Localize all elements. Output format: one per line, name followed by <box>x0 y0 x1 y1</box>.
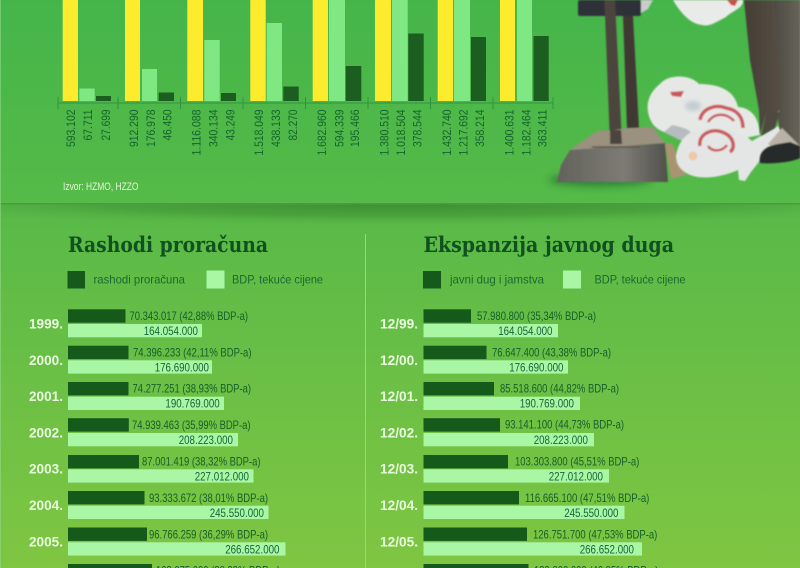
row 2001 <box>29 382 251 410</box>
row 12/99: 12/99. <box>380 316 418 332</box>
bar group 8: 1.400.631 <box>502 109 516 156</box>
row 2005: 2005. <box>29 533 63 549</box>
panel: public debt expansion <box>380 232 686 568</box>
row 12/05: 266.652.000 <box>580 542 634 556</box>
row 1999: 1999. <box>29 316 63 332</box>
row 2001: 74.277.251 (38,93% BDP-a) <box>132 382 251 396</box>
row 12/03: 227.012.000 <box>549 470 603 484</box>
bar group 6: 378.544 <box>410 109 424 147</box>
row 2000 <box>29 345 252 374</box>
bar group 7: 358.214 <box>473 109 487 147</box>
row 12/02: 208.223.000 <box>534 433 588 447</box>
row 2006 <box>68 564 280 568</box>
bar group 5: 594.339 <box>332 109 346 147</box>
legend <box>68 270 323 288</box>
row 12/02: 12/02. <box>380 424 418 440</box>
section shadow band <box>0 203 800 227</box>
legs and shoe <box>744 0 800 163</box>
row 12/04 <box>380 491 649 520</box>
bar group 2 <box>125 0 174 147</box>
bar group 5 <box>313 0 362 156</box>
row 12/00 <box>380 345 611 374</box>
row 12/01 <box>380 382 619 410</box>
row 2003: 227.012.000 <box>195 470 249 484</box>
row 12/99: 57.980.800 (35,34% BDP-a) <box>477 309 596 323</box>
row 2002: 208.223.000 <box>179 433 233 447</box>
bar group 6: 1.380.510 <box>378 109 392 156</box>
row 12/02: 93.141.100 (44,73% BDP-a) <box>505 418 624 432</box>
legend: BDP, tekuće cijene <box>594 272 686 286</box>
lower panel background <box>0 203 800 568</box>
row 12/03: 103.303.800 (45,51% BDP-a) <box>515 454 639 468</box>
bar group 6: 1.018.504 <box>394 109 408 156</box>
top panel background <box>0 0 800 203</box>
bar group 3 <box>187 0 238 156</box>
row 2002: 74.939.463 (35,99% BDP-a) <box>132 418 250 432</box>
row 2004 <box>29 491 268 520</box>
row 12/05 <box>380 528 657 556</box>
heading: Rashodi proračuna: Rashodi proračuna <box>68 232 268 257</box>
row 12/04: 12/04. <box>380 497 418 513</box>
bar group 5: 195.466 <box>348 109 362 147</box>
bag pile <box>648 76 782 181</box>
chart axis <box>58 97 553 109</box>
bar group 7: 1.217.692 <box>456 109 470 156</box>
bar group 2: 176.978 <box>144 109 158 147</box>
row 2005: 266.652.000 <box>225 542 280 556</box>
bar group 2: 46.450 <box>160 109 174 140</box>
row 2002 <box>29 418 250 447</box>
row 2001: 2001. <box>29 388 63 404</box>
row 12/02 <box>380 418 624 447</box>
bar group 1: 27.699 <box>99 109 113 140</box>
row 12/00: 76.647.400 (43,38% BDP-a) <box>492 345 611 359</box>
row 2004: 2004. <box>29 497 63 513</box>
bar group 4: 82.270 <box>286 109 300 140</box>
row 2003: 87.001.419 (38,32% BDP-a) <box>142 454 260 468</box>
row 2000: 176.690.000 <box>155 360 209 374</box>
row 12/00: 176.690.000 <box>509 360 564 374</box>
illustration: concrete post base, plastic bags and legs <box>548 0 800 186</box>
row 2005: 96.766.259 (36,29% BDP-a) <box>149 528 268 542</box>
bar group 8: 1.182.464 <box>520 109 534 156</box>
row 12/05: 126.751.700 (47,53% BDP-a) <box>533 528 657 542</box>
row 2003: 2003. <box>29 460 63 476</box>
bar group 1 <box>63 0 113 147</box>
row 2000: 2000. <box>29 352 63 368</box>
bar group 1: 593.102 <box>64 109 78 147</box>
ground shadow <box>548 174 652 186</box>
row 2004: 93.333.672 (38,01% BDP-a) <box>149 491 268 505</box>
row 12/03 <box>380 454 639 484</box>
bar group 6 <box>375 0 424 156</box>
row 12/03: 12/03. <box>380 460 418 476</box>
bar group 7: 1.432.740 <box>440 109 454 156</box>
sign post <box>578 0 653 144</box>
row 12/99 <box>380 309 596 338</box>
row 12/04: 245.550.000 <box>564 506 619 520</box>
bar group 4 <box>250 0 300 156</box>
bar group 3: 340.134 <box>206 109 220 147</box>
row 2002: 2002. <box>29 424 63 440</box>
row 12/01: 190.769.000 <box>520 396 574 410</box>
row 1999: 70.343.017 (42,88% BDP-a) <box>130 309 248 323</box>
divider between columns <box>364 234 366 568</box>
bar group 4: 1.518.049 <box>252 109 266 156</box>
row 12/01: 85.518.600 (44,82% BDP-a) <box>500 382 619 396</box>
row 2005 <box>29 528 286 556</box>
legend <box>423 270 686 288</box>
row 12/99: 164.054.000 <box>498 324 553 338</box>
row 12/01: 12/01. <box>380 388 418 404</box>
bar group 1: 67.711 <box>81 109 95 140</box>
heading: Ekspanzija javnog duga: Ekspanzija javnog duga <box>424 232 674 257</box>
row 2001: 190.769.000 <box>165 396 220 410</box>
panel: budget expenditure <box>29 232 323 568</box>
row 2004: 245.550.000 <box>210 506 264 520</box>
row 12/04: 116.665.100 (47,51% BDP-a) <box>525 491 649 505</box>
hanging bag <box>673 0 743 25</box>
section edge line <box>0 203 800 204</box>
legend: javni dug i jamstva <box>449 272 544 286</box>
source note: Izvor: HZMO, HZZO <box>63 181 139 193</box>
row 2003 <box>29 454 260 484</box>
row 2000: 74.396.233 (42,11% BDP-a) <box>133 345 252 359</box>
bar group 5: 1.682.960 <box>315 109 329 156</box>
row 12/05: 12/05. <box>380 533 418 549</box>
legend: BDP, tekuće cijene <box>232 272 323 286</box>
bar group 8: 363.411 <box>536 109 550 147</box>
bar group 3: 1.116.088 <box>190 109 204 156</box>
bar group 7 <box>438 0 487 156</box>
row 1999: 164.054.000 <box>144 324 198 338</box>
left edge line <box>0 0 1 568</box>
row 12/06 <box>424 564 658 568</box>
bar group 2: 912.290 <box>127 109 141 147</box>
concrete base <box>557 127 686 182</box>
bar group 4: 438.133 <box>269 109 283 147</box>
legend: rashodi proračuna <box>94 272 185 286</box>
top bar chart <box>58 0 553 156</box>
bar group 8 <box>500 0 550 156</box>
row 12/00: 12/00. <box>380 352 418 368</box>
row 1999 <box>29 309 248 338</box>
bar group 3: 43.249 <box>224 109 238 140</box>
